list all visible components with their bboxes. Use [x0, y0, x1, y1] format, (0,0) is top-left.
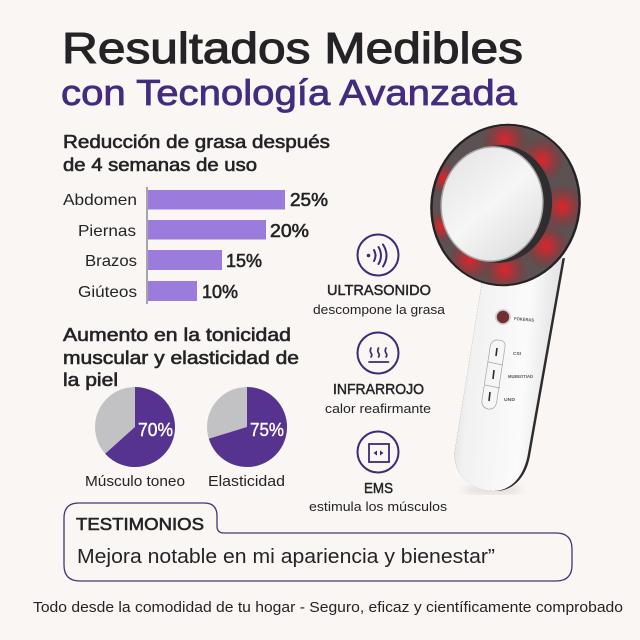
- title: Resultados Medibles: [62, 24, 523, 73]
- bar: Glúteos: Giúteos: [78, 284, 137, 301]
- heading: fat reduction: Reducción de grasa después: [63, 131, 330, 152]
- icon: sound waves: [358, 234, 398, 276]
- pie chart: Elasticidad: [207, 387, 287, 490]
- testimonial panel: [64, 503, 572, 581]
- bar: Piernas: [78, 220, 309, 241]
- bar: Piernas: Piernas: [78, 223, 136, 240]
- feature: infrarrojo: INFRARROJO: [333, 382, 424, 398]
- pie chart: Elasticidad: 75%: [250, 420, 284, 440]
- heading: muscle tone: Aumento en la tonicidad: [63, 324, 291, 345]
- icon: heat waves: [358, 332, 398, 374]
- device head ring with red LEDs: [430, 124, 581, 286]
- bar: Abdomen: 25%: [290, 190, 328, 210]
- bar: Abdomen: [63, 190, 328, 210]
- feature: ultrasonido: ULTRASONIDO: [327, 283, 431, 299]
- bar: Glúteos: 10%: [202, 282, 238, 302]
- feature: EMS: EMS: [364, 481, 393, 497]
- pie chart: Músculo toneo: [85, 387, 185, 490]
- heading: fat reduction: de 4 semanas de uso: [63, 154, 257, 175]
- pie chart: Músculo toneo: Músculo toneo: [85, 473, 185, 490]
- icon: electrode pad: [358, 432, 398, 472]
- bar: Glúteos: [78, 281, 238, 302]
- bar: Brazos: [85, 250, 262, 271]
- pie chart: Músculo toneo: 70%: [138, 420, 173, 440]
- device mode buttons: [482, 340, 534, 409]
- pie chart: Elasticidad: Elasticidad: [208, 473, 285, 490]
- footer text: Todo desde la comodidad de tu hogar - Seguro, eficaz y científicamente comprobado: [33, 600, 623, 616]
- feature: ultrasonido: descompone la grasa: [313, 302, 446, 317]
- device: body-sculpting wand: [430, 124, 581, 495]
- feature: infrarrojo: calor reafirmante: [325, 401, 431, 416]
- bar: Piernas: 20%: [270, 221, 309, 241]
- feature: EMS: [309, 432, 448, 514]
- heading: muscle tone: la piel: [63, 369, 118, 390]
- feature: EMS: estimula los músculos: [309, 499, 448, 514]
- feature: ultrasonido: [313, 234, 446, 317]
- bar: Brazos: 15%: [226, 251, 262, 271]
- device power button: [495, 309, 534, 325]
- testimonial panel: TESTIMONIOS: [76, 514, 204, 534]
- device power button: FOKERAS: [514, 316, 534, 323]
- heading: fat reduction: [63, 131, 330, 175]
- device mode buttons: CSI: [513, 351, 521, 356]
- heading: muscle tone: muscular y elasticidad de: [63, 347, 299, 368]
- bar: Brazos: Brazos: [85, 253, 137, 270]
- subtitle: con Tecnología Avanzada: [61, 72, 518, 113]
- testimonial panel: Mejora notable en mi apariencia y bienestar”: [77, 546, 495, 568]
- feature: infrarrojo: [325, 332, 431, 416]
- bar chart: fat reduction: [63, 187, 328, 304]
- device mode buttons: UND: [504, 397, 516, 402]
- device mode buttons: MUEEOTIAD: [508, 374, 534, 379]
- heading: muscle tone: [63, 324, 299, 390]
- device handle: [455, 258, 565, 493]
- bar: Abdomen: Abdomen: [63, 192, 137, 209]
